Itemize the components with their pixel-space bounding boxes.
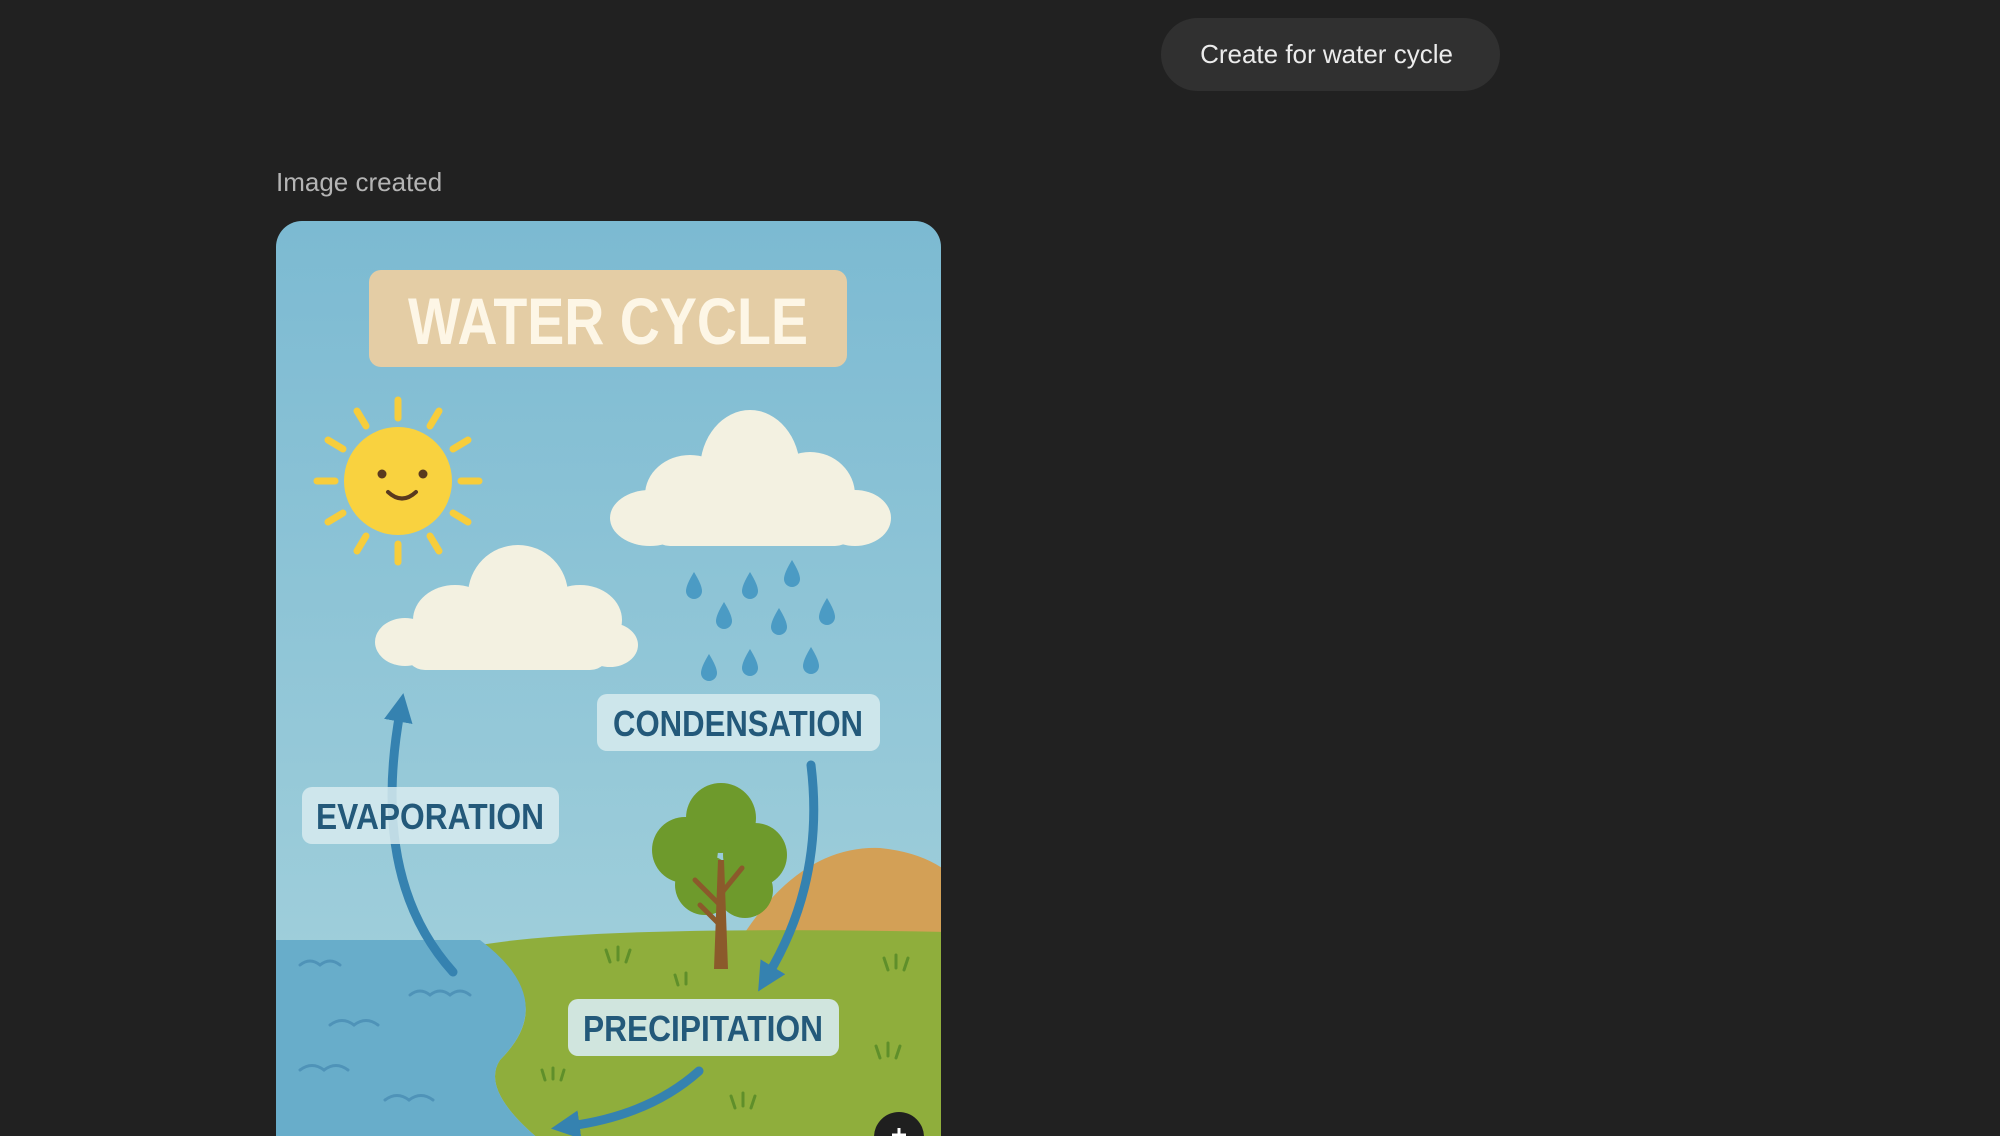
icon: scroll button — [874, 1112, 924, 1136]
arrow: evaporation — [392, 712, 453, 972]
icon: sun — [317, 400, 479, 562]
label: evaporation — [302, 787, 559, 844]
grass ground — [480, 930, 945, 1136]
label: evaporation: EVAPORATION — [316, 796, 544, 837]
icon: raindrops — [686, 560, 835, 681]
title banner: WATER CYCLE — [408, 284, 808, 358]
arrow: condensation to precipitation — [768, 765, 814, 975]
user message bubble: Create for water cycle — [1200, 39, 1453, 69]
icon: tree — [652, 783, 787, 969]
waves — [300, 961, 470, 1100]
label: condensation: CONDENSATION — [613, 703, 863, 744]
infographic card — [276, 221, 941, 1136]
water — [276, 940, 540, 1136]
label: precipitation — [568, 999, 839, 1056]
user message bubble — [1161, 18, 1500, 91]
arrow: precipitation to water — [570, 1071, 699, 1126]
icon: rain cloud — [610, 410, 891, 546]
grass tufts — [542, 947, 908, 1108]
hill — [746, 848, 941, 932]
label: condensation — [597, 694, 880, 751]
title banner — [369, 270, 847, 367]
caption: image created: Image created — [276, 167, 442, 197]
icon: small cloud — [375, 545, 638, 670]
label: precipitation: PRECIPITATION — [583, 1008, 823, 1049]
